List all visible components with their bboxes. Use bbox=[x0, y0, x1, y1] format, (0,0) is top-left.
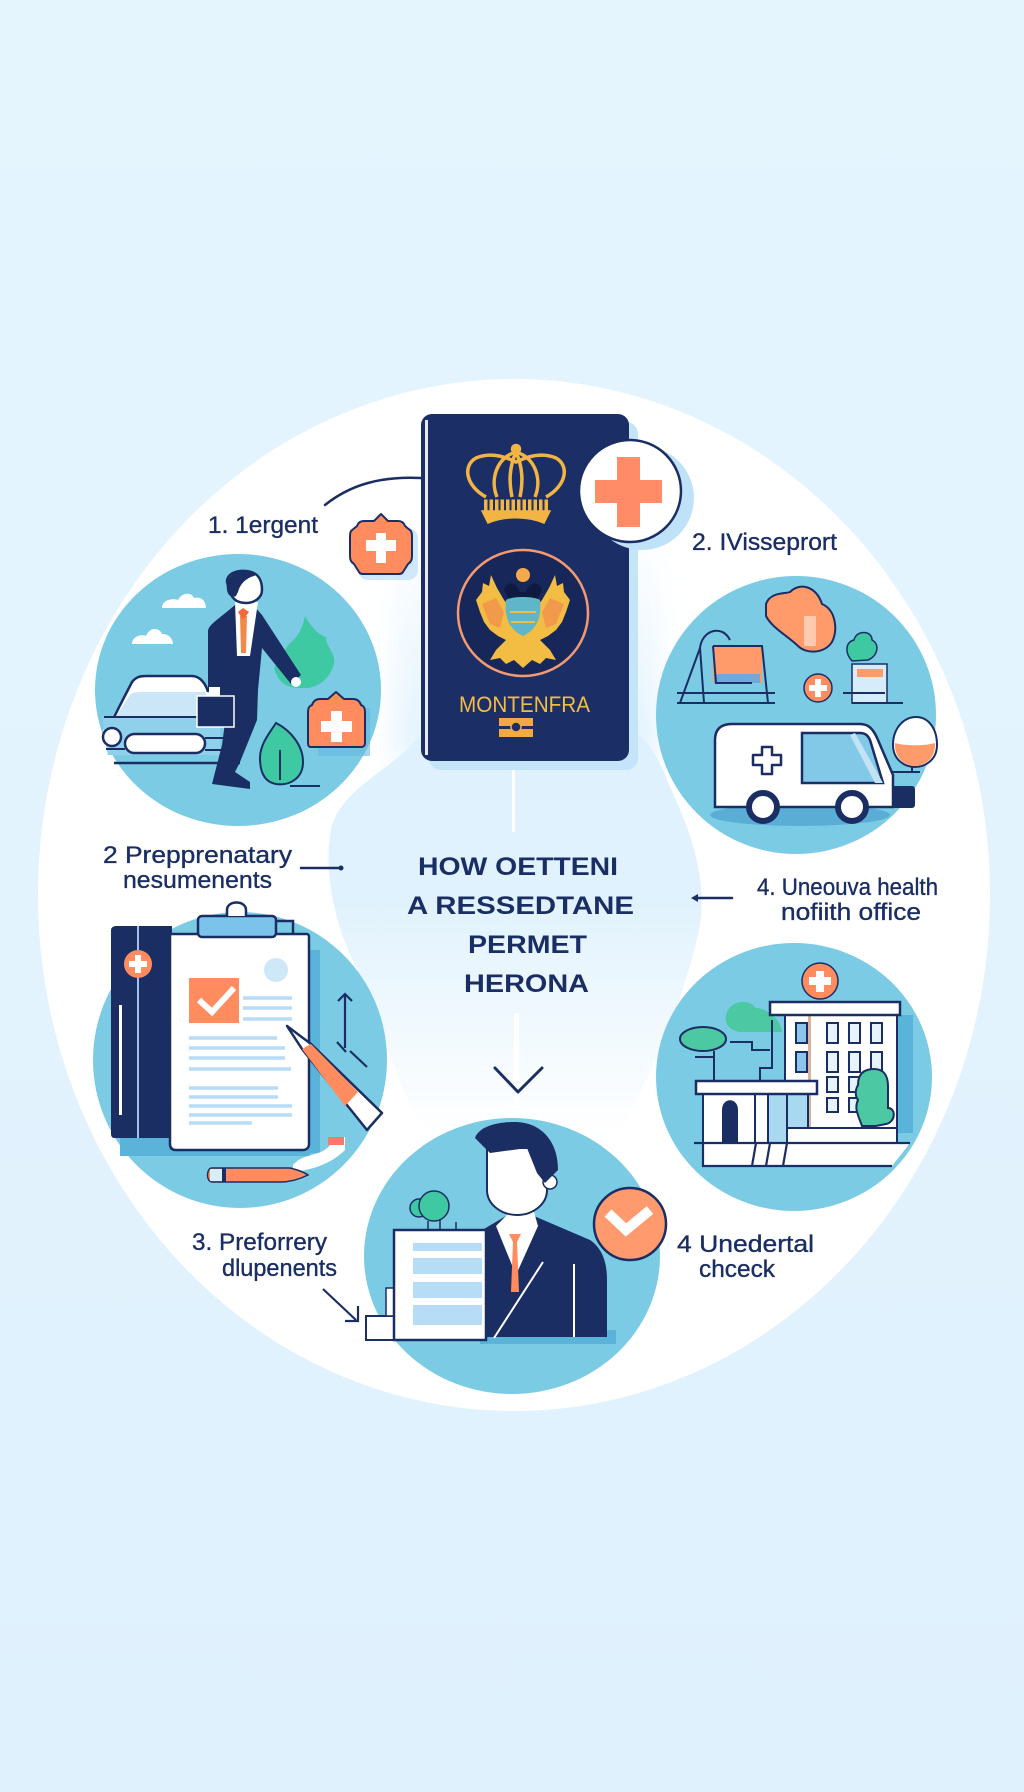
step 4 lower label: chceck bbox=[699, 1256, 776, 1283]
title: HOW OETTENI bbox=[418, 853, 618, 881]
ambulance bbox=[710, 724, 920, 826]
title: PERMET bbox=[468, 931, 587, 959]
small plant bbox=[410, 1191, 456, 1230]
clipboard clip bbox=[198, 902, 293, 937]
round tree bbox=[680, 1020, 772, 1081]
entrance wing bbox=[696, 1081, 817, 1144]
step 2 label: passport: 2. IVisseprort bbox=[692, 529, 837, 556]
step 4 lower label: 4 Unedertal bbox=[677, 1231, 814, 1258]
passport country name: MONTENFRA bbox=[459, 692, 590, 717]
up arrow bbox=[337, 994, 367, 1067]
arrow: chevron down bbox=[495, 1068, 542, 1092]
title: A RESSEDTANE bbox=[407, 892, 634, 920]
orange cloud bbox=[766, 587, 835, 652]
icon: small first aid kit bbox=[350, 514, 418, 580]
connector: line below passport bbox=[512, 762, 515, 832]
passport bbox=[421, 414, 638, 770]
panel: step 2 ambulance illustration bbox=[656, 576, 937, 854]
front hedge bbox=[856, 1069, 894, 1126]
small leaf bbox=[260, 723, 320, 786]
soft glow around passport bbox=[395, 520, 660, 760]
icon: red cross badge bbox=[579, 440, 694, 550]
emblem: double-headed eagle bbox=[458, 550, 588, 676]
step 2 left label: 2 Prepprenatary bbox=[103, 842, 292, 869]
tree backdrop bbox=[726, 1002, 782, 1032]
pen on desk bbox=[208, 1137, 345, 1182]
person walking bbox=[208, 571, 301, 789]
connector: curve to passport bbox=[325, 478, 421, 505]
hospital tower bbox=[770, 1002, 913, 1133]
step 3 label: dlupenents bbox=[222, 1255, 337, 1282]
panel: step 3 clipboard illustration bbox=[93, 902, 387, 1208]
leafy plant bbox=[274, 616, 334, 688]
potted plant bbox=[843, 632, 903, 703]
step 2 left label: nesumenents bbox=[123, 867, 272, 894]
pencil bbox=[287, 1026, 382, 1130]
car bbox=[103, 676, 240, 763]
arrow: to person panel bbox=[323, 1289, 358, 1321]
central light blue area bbox=[329, 735, 702, 1140]
document sheet bbox=[170, 934, 309, 1150]
title bbox=[407, 853, 634, 998]
step 3 label: 3. Preforrery bbox=[192, 1229, 327, 1256]
arrow: right to title bbox=[301, 866, 344, 870]
step 4 right label: nofiith office bbox=[781, 899, 921, 926]
easel with sheet bbox=[677, 631, 775, 703]
check badge bbox=[594, 1188, 666, 1260]
large white circle bbox=[38, 379, 990, 1411]
document bbox=[366, 1230, 486, 1340]
balloon shape bbox=[893, 717, 937, 767]
dark folder bbox=[111, 926, 172, 1138]
official body bbox=[472, 1212, 616, 1344]
first aid kit bbox=[308, 692, 370, 756]
arrow: left to title bbox=[691, 894, 732, 902]
base platform bbox=[694, 1128, 910, 1166]
panel: step 5 official with document bbox=[364, 1118, 666, 1394]
cross badge on roof bbox=[802, 963, 838, 999]
step 1 label: 1. 1ergent bbox=[208, 512, 318, 539]
icon: crown bbox=[468, 446, 564, 523]
panel: step 4 health office building bbox=[656, 943, 932, 1211]
official head bbox=[475, 1122, 558, 1215]
clouds bbox=[132, 594, 206, 644]
small cross badge bbox=[804, 674, 832, 702]
icon: biometric chip bbox=[499, 718, 533, 737]
briefcase bbox=[197, 687, 234, 727]
step 4 right label: 4. Uneouva health bbox=[757, 874, 938, 901]
title: HERONA bbox=[464, 970, 589, 998]
connector: line above person bbox=[514, 1013, 519, 1113]
panel: step 1 traveller illustration bbox=[95, 554, 381, 826]
